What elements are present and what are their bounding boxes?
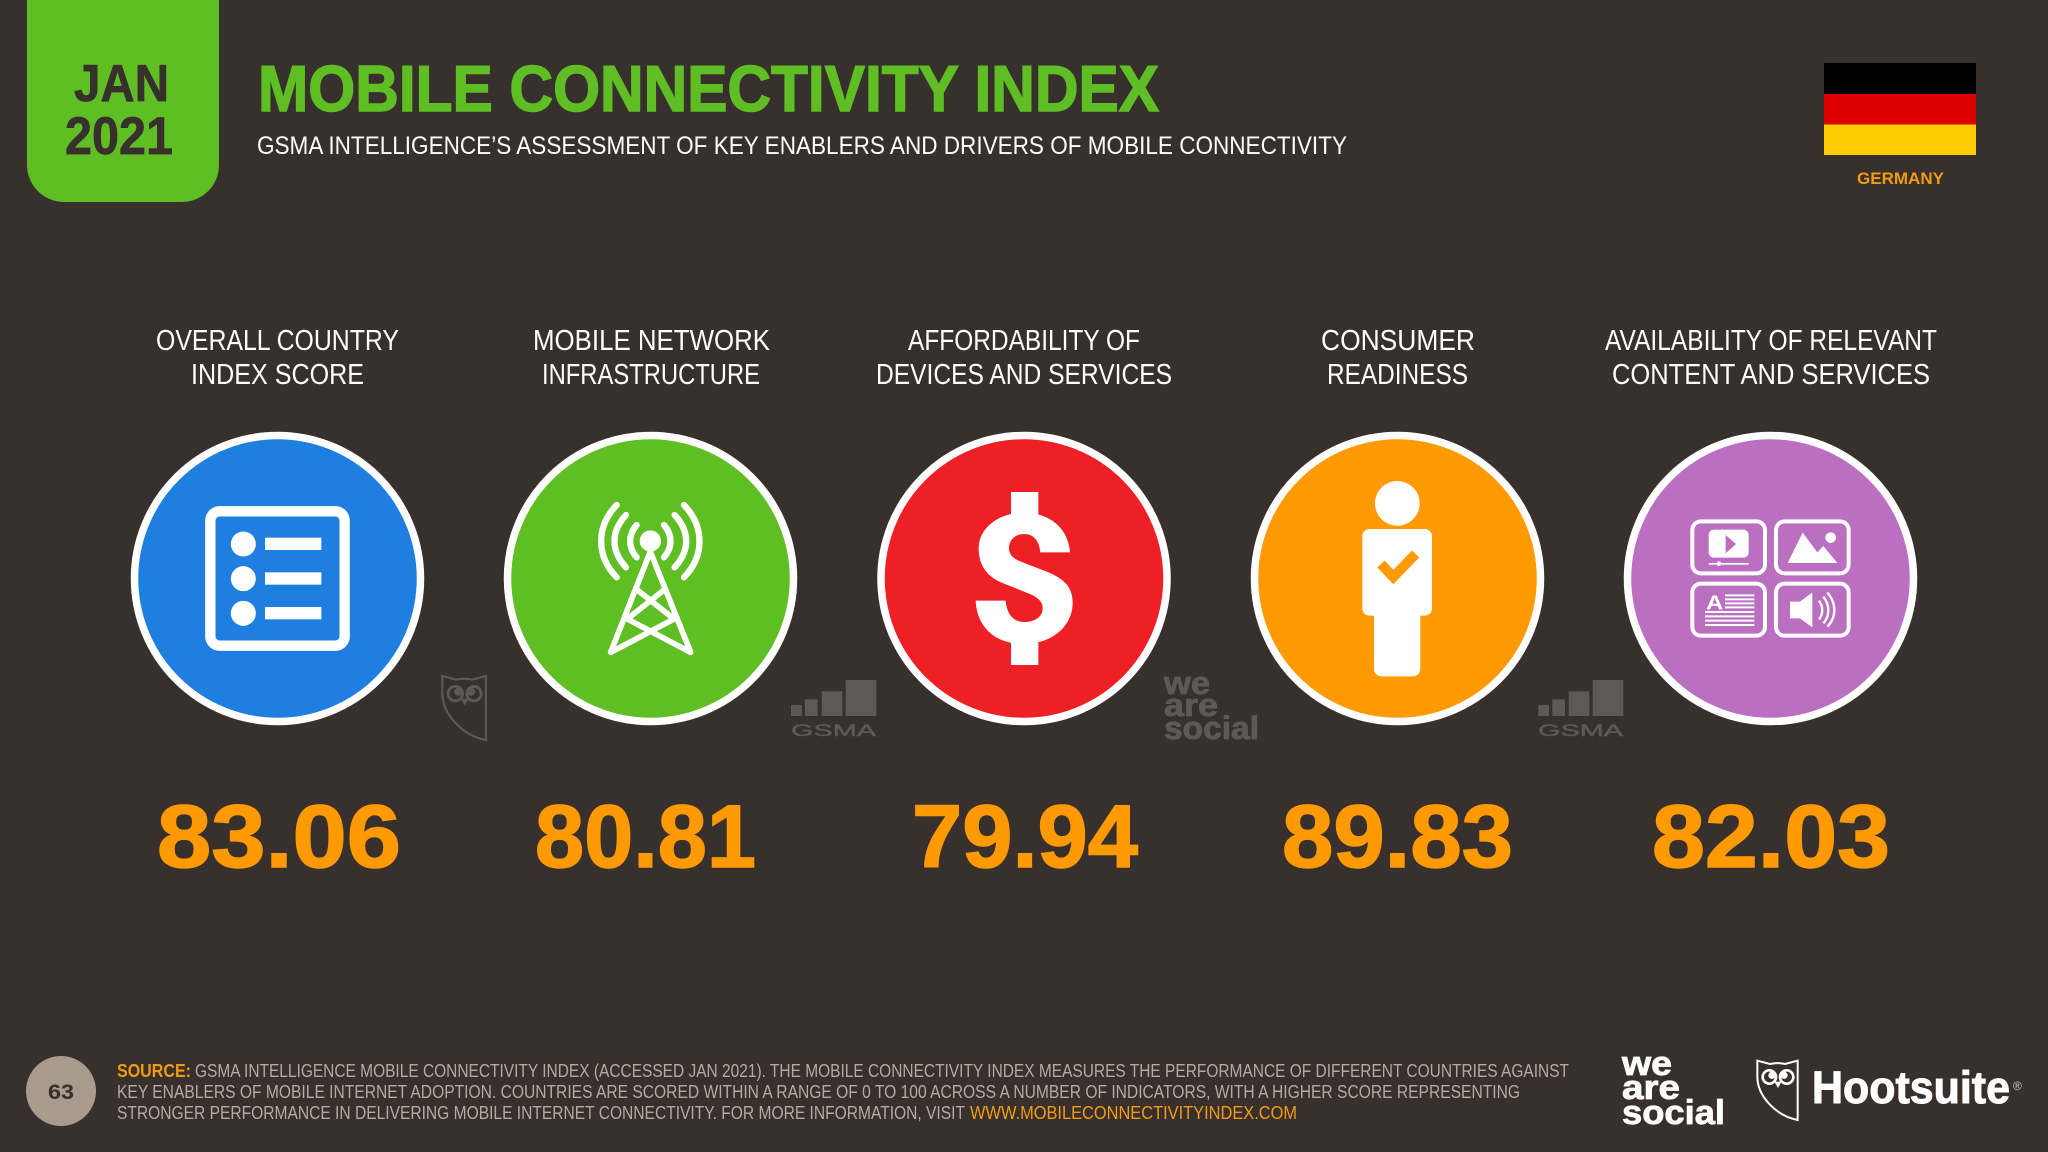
watermark: GSMA: GSMA xyxy=(1538,721,1624,740)
logo: we are social xyxy=(1621,1045,1725,1132)
circle: purple xyxy=(1628,436,1914,722)
score: 79.94 xyxy=(912,786,1139,886)
logo: we are social: social xyxy=(1622,1094,1725,1132)
heading: infrastructure: MOBILE NETWORK xyxy=(533,325,771,357)
subtitle: GSMA INTELLIGENCE’S ASSESSMENT OF KEY ENABLERS AND DRIVERS OF MOBILE CONNECTIVITY xyxy=(257,132,1347,160)
heading: consumer readiness: CONSUMER xyxy=(1321,325,1475,357)
icon: dollar sign xyxy=(976,492,1073,665)
heading: relevant content xyxy=(1605,325,1937,391)
logo: hootsuite: Hootsuite xyxy=(1812,1062,2010,1113)
heading: relevant content: CONTENT AND SERVICES xyxy=(1612,359,1930,391)
circle: blue xyxy=(134,436,420,722)
logo: we are social: are xyxy=(1622,1069,1680,1107)
logo: hootsuite xyxy=(1757,1061,2022,1120)
column: consumer readiness xyxy=(1254,325,1540,886)
watermark: GSMA xyxy=(791,680,877,740)
source note: STRONGER PERFORMANCE IN DELIVERING MOBILE INTERNET CONNECTIVITY. FOR MORE INFORMATION, VISIT xyxy=(117,1103,965,1123)
score: 83.06 xyxy=(157,786,401,886)
column: mobile network infrastructure xyxy=(508,325,794,886)
heading: overall score: OVERALL COUNTRY xyxy=(156,325,399,357)
logo: hootsuite: ® xyxy=(2013,1079,2022,1093)
page number: 63 xyxy=(48,1081,74,1104)
date badge xyxy=(27,0,219,202)
score: 89.83 xyxy=(1282,786,1513,886)
score: 80.81 xyxy=(535,786,756,886)
icon: owl xyxy=(1757,1061,1798,1120)
circle: red xyxy=(881,436,1167,722)
source note: SOURCE: xyxy=(117,1061,191,1081)
date badge: 2021 xyxy=(65,107,173,166)
column: affordability xyxy=(876,325,1172,886)
icon: list xyxy=(210,511,345,646)
column: overall country index score xyxy=(134,325,420,886)
watermark: we are social: we xyxy=(1163,665,1210,701)
source note: KEY ENABLERS OF MOBILE INTERNET ADOPTION. COUNTRIES ARE SCORED WITHIN A RANGE OF 0 TO 100 ACROSS A NUMBER OF INDICATORS, WITH A HIGHER SCORE REPRESENTING xyxy=(117,1082,1520,1102)
heading: affordability: AFFORDABILITY OF xyxy=(908,325,1140,357)
source note: GSMA INTELLIGENCE MOBILE CONNECTIVITY INDEX (ACCESSED JAN 2021). THE MOBILE CONNECTIVITY INDEX MEASURES THE PERFORMANCE OF DIFFERENT COUNTRIES AGAINST xyxy=(195,1061,1569,1081)
heading: consumer readiness xyxy=(1321,325,1475,391)
watermark: we are social xyxy=(1163,665,1259,746)
heading: overall score: INDEX SCORE xyxy=(191,359,364,391)
heading: affordability xyxy=(876,325,1172,391)
circle: green xyxy=(508,436,794,722)
title: MOBILE CONNECTIVITY INDEX xyxy=(258,52,1159,125)
heading: consumer readiness: READINESS xyxy=(1327,359,1468,391)
watermark: hootsuite owl xyxy=(442,676,486,740)
circle: orange xyxy=(1254,436,1540,722)
icon: content types: A xyxy=(1706,592,1723,614)
watermark: GSMA xyxy=(1538,680,1624,740)
heading: infrastructure xyxy=(533,325,771,391)
watermark: we are social: are xyxy=(1164,687,1218,723)
page number xyxy=(26,1056,96,1126)
source note: WWW.MOBILECONNECTIVITYINDEX.COM xyxy=(970,1103,1297,1123)
watermark: GSMA: GSMA xyxy=(791,721,877,740)
icon: person with check xyxy=(1362,481,1432,676)
column: relevant content xyxy=(1605,325,1937,886)
icon: signal tower xyxy=(601,505,699,652)
icon: content types xyxy=(1692,521,1849,636)
source note xyxy=(117,1061,1569,1123)
score: 82.03 xyxy=(1652,786,1890,886)
heading: overall score xyxy=(156,325,399,391)
heading: affordability: DEVICES AND SERVICES xyxy=(876,359,1172,391)
heading: relevant content: AVAILABILITY OF RELEVANT xyxy=(1605,325,1937,357)
country label: GERMANY xyxy=(1857,169,1945,188)
watermark: we are social: social xyxy=(1164,710,1259,746)
date badge: JAN xyxy=(74,55,169,113)
heading: infrastructure: INFRASTRUCTURE xyxy=(542,359,760,391)
flag: Germany xyxy=(1824,63,1976,155)
logo: we are social: we xyxy=(1621,1045,1672,1083)
